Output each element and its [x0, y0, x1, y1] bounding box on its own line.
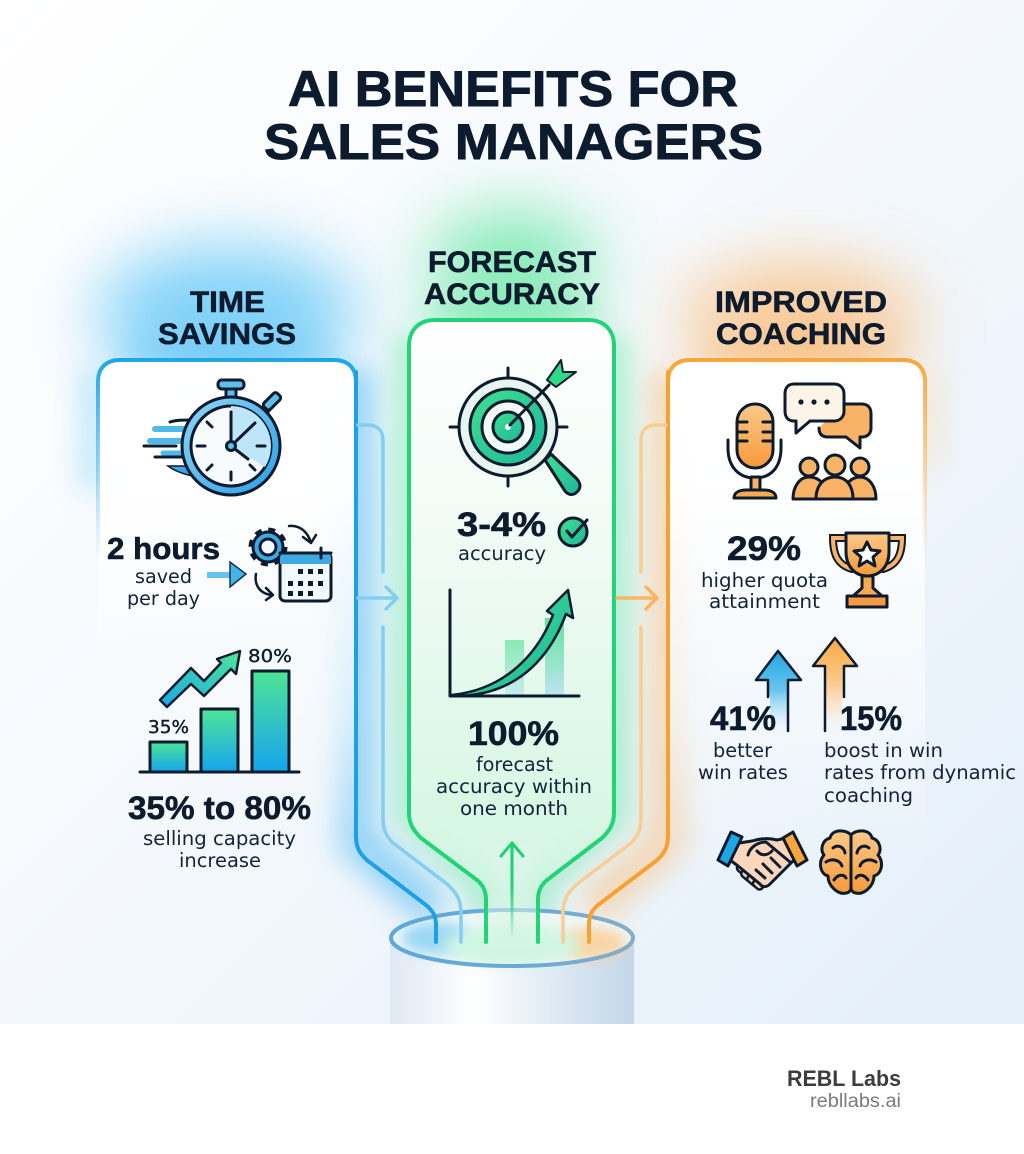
icon: target with magnifier — [450, 360, 580, 495]
icon: people — [793, 455, 876, 499]
stat: 41% better win rates — [698, 700, 788, 784]
heading: forecast accuracy: FORECAST — [428, 246, 596, 279]
stat: 29% higher quota attainment: attainment — [709, 590, 820, 613]
footer: brand: REBL Labs — [787, 1066, 901, 1091]
icon: stopwatch — [144, 380, 282, 495]
arrow: centre up — [501, 843, 523, 938]
arrow: orange up — [813, 638, 857, 731]
title: SALES MANAGERS — [264, 114, 763, 170]
heading: improved coaching: COACHING — [716, 318, 886, 351]
stat: 15% boost in win rates: boost in win — [824, 739, 943, 762]
stat: selling capacity: increase — [179, 849, 261, 872]
glows behind panels — [92, 210, 932, 925]
stat: 100% forecast accuracy: one month — [460, 797, 568, 820]
heading: forecast accuracy: ACCURACY — [424, 278, 600, 311]
stat: 41% better win rates: 41% — [710, 700, 776, 738]
stat: selling capacity — [128, 790, 311, 872]
footer: brand: rebllabs.ai — [810, 1091, 901, 1112]
heading: time savings: SAVINGS — [158, 318, 296, 351]
stat: 2 hours saved per day: per day — [127, 587, 200, 610]
icon: microphone — [728, 404, 781, 498]
stat: 100% forecast accuracy: forecast — [476, 753, 553, 776]
stat: 29% higher quota attainment — [701, 530, 828, 613]
stat: selling capacity: selling capacity — [143, 827, 296, 850]
stat: 15% boost in win rates — [824, 700, 1016, 807]
connector: blue line and arrow — [358, 425, 461, 942]
stat: 41% better win rates: better — [713, 739, 773, 762]
stat: 3-4% accuracy: accuracy — [458, 542, 546, 565]
chart: selling capacity bars: 35% — [148, 717, 189, 738]
heading: time savings — [158, 286, 296, 351]
stat: 29% higher quota attainment: higher quota — [701, 569, 828, 592]
panel: forecast accuracy — [409, 320, 614, 950]
panel: time savings — [98, 360, 436, 942]
title — [264, 61, 763, 170]
stat: 3-4% accuracy — [457, 506, 546, 565]
heading: forecast accuracy — [424, 246, 600, 311]
chart: selling capacity bars: 80% — [248, 646, 292, 667]
base cylinder — [390, 910, 634, 1024]
stat: 100% forecast accuracy — [436, 715, 592, 820]
stat: 2 hours saved per day: 2 hours — [107, 531, 220, 566]
stat: 2 hours saved per day — [107, 531, 220, 610]
icon: arrow into calendar — [207, 562, 246, 587]
heading: improved coaching — [715, 286, 887, 351]
icon: trophy — [833, 533, 902, 607]
icon: check badge — [559, 518, 587, 546]
chart: forecast growth curve — [450, 590, 579, 696]
icon: handshake — [718, 832, 807, 891]
stat: 15% boost in win rates: rates from dynamic — [824, 761, 1016, 784]
panel: improved coaching — [589, 360, 925, 942]
footer: brand — [787, 1066, 901, 1112]
icon: gear and calendar — [253, 526, 331, 601]
stat: 41% better win rates: win rates — [698, 761, 788, 784]
stat: 100% forecast accuracy: accuracy within — [436, 775, 592, 798]
title: AI BENEFITS FOR — [288, 61, 738, 117]
chart: selling capacity bars — [140, 646, 299, 772]
heading: time savings: TIME — [190, 286, 265, 319]
stat: 100% forecast accuracy: 100% — [468, 715, 559, 753]
stat: 15% boost in win rates: 15% — [840, 700, 902, 738]
arrow: blue up — [756, 651, 801, 731]
stat: 2 hours saved per day: saved — [135, 565, 192, 588]
heading: improved coaching: IMPROVED — [715, 286, 887, 319]
icon: brain — [821, 831, 881, 893]
stat: 15% boost in win rates: coaching — [824, 784, 913, 807]
icon: chat bubbles — [785, 384, 871, 448]
stat: selling capacity: 35% to 80% — [128, 790, 311, 826]
stat: 29% higher quota attainment: 29% — [727, 530, 801, 568]
connector: orange line and arrow — [563, 425, 666, 942]
stat: 3-4% accuracy: 3-4% — [457, 506, 546, 544]
